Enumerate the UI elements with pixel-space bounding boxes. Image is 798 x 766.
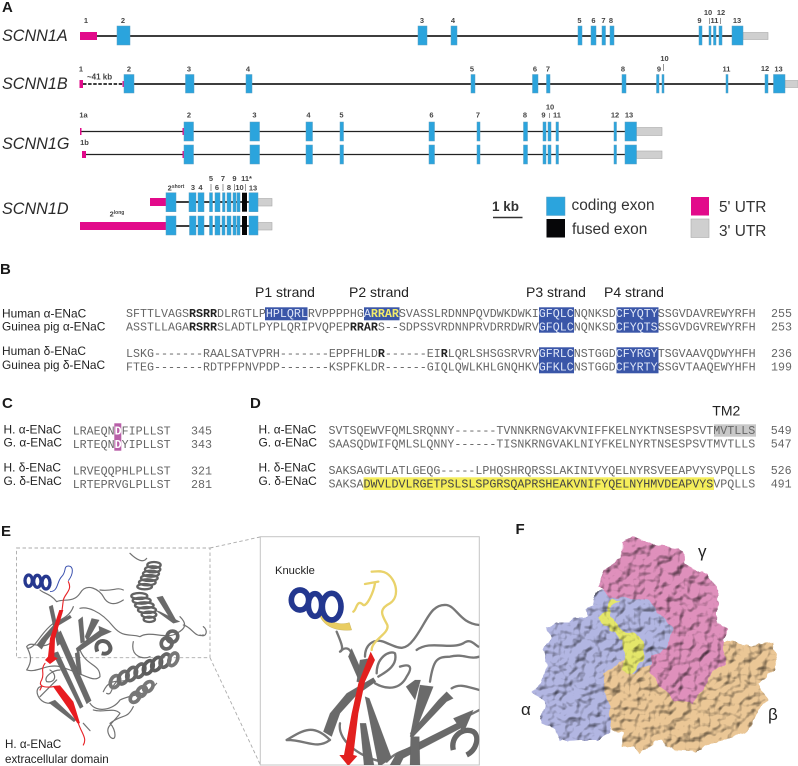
gene SCNN1B: ~41 kb: [87, 72, 112, 82]
subunit labels: γ: [698, 542, 707, 561]
panel letter E: E: [1, 523, 11, 540]
sequences: SVTSQEWVFQMLSRQNNY------TVNNKRNGVAKVNIFFKELNYKTNSESPSVTMVTLLS: [328, 424, 755, 438]
labels: G. δ-ENaC: [4, 474, 62, 488]
strand headings: P3 strand: [526, 284, 586, 300]
panel letter D: D: [250, 395, 261, 412]
sequences: [73, 425, 212, 492]
gene SCNN1B: 9: [657, 64, 661, 74]
sequence labels: Guinea pig α-ENaC: [2, 320, 106, 334]
inset ribbon: [287, 571, 479, 766]
gene SCNN1G: [2, 102, 662, 164]
gene SCNN1A: 10: [704, 8, 712, 17]
panel E: extracellular domain ribbon: [1, 523, 479, 766]
label: H. alpha-ENaC extracellular domain: extracellular domain: [5, 753, 109, 766]
gene SCNN1D: 6: [215, 183, 219, 192]
gene SCNN1A: 7: [601, 16, 606, 25]
gene SCNN1A: 12: [717, 8, 725, 17]
sequences: SAKSAGWTLATLGEQG-----LPHQSHRQRSSLAKINIVYQELNYRSVEEAPVYSVPQLLS: [328, 464, 755, 478]
gene SCNN1D: long: [114, 210, 124, 216]
sequences: 321: [191, 465, 212, 479]
gene SCNN1D: 13: [249, 184, 257, 192]
gene SCNN1D: 2: [168, 184, 172, 192]
sequences: 199: [771, 360, 792, 374]
scale bar 1 kb: 1 kb: [492, 199, 519, 214]
highlighted aspartate: [114, 423, 121, 451]
sequences: ASSTLLAGARSRRSLADTLPYPLQRIPVQPEPRRARS--SDPSSVRDNNPRVDRRDWRVGFQLCNQNKSDCFYQTSSSGVDGVREWYRFH: [126, 320, 756, 334]
sequences: 345: [191, 425, 212, 439]
gene SCNN1G: 1a: [79, 110, 88, 120]
gene SCNN1A: 8: [609, 16, 613, 25]
gene SCNN1D: 5: [209, 174, 213, 183]
gene SCNN1G: 10: [546, 102, 554, 112]
sequences: 491: [771, 477, 792, 491]
gene SCNN1B: 5: [470, 64, 474, 74]
sequences: 526: [771, 464, 792, 478]
labels: [4, 422, 62, 488]
zoom selection box and connectors: [16, 537, 260, 764]
legend: 5' UTR: [719, 199, 766, 216]
gene SCNN1G: 1b: [80, 138, 89, 147]
gene SCNN1B: 12: [761, 64, 769, 73]
panel letter F: F: [516, 521, 525, 538]
gene SCNN1G: 9: [541, 110, 546, 120]
labels: G. δ-ENaC: [258, 474, 317, 488]
strand headings: P1 strand: [255, 284, 315, 300]
sequences: LSKG-------RAALSATVPRH-------EPPFHLDR------EIRLQRLSHSGSRVRVGFRLCNSTGGDCFYRGYTSGVAAVQDWYHFH: [126, 347, 756, 361]
panel letter B: B: [0, 261, 11, 278]
TM2 heading: TM2: [712, 402, 741, 418]
gene SCNN1D: SCNN1D: [2, 200, 69, 218]
gene SCNN1D: 8: [227, 183, 231, 192]
strand headings: [255, 284, 664, 300]
panel B: alignment of P strands: [0, 261, 792, 374]
gene SCNN1G: 8: [523, 110, 527, 120]
gene SCNN1B: SCNN1B: [2, 75, 68, 93]
gene SCNN1D: 4: [198, 183, 203, 192]
sequences: LRAEQNDFIPLLST: [73, 425, 171, 439]
sequences: [126, 307, 792, 374]
sequences: SAKSADWVLDVLRGETPSLSLSPGRSQAPRSHEAKVNIFYQELNYHMVDEAPVYSVPQLLS: [328, 477, 755, 491]
gene SCNN1A: 3: [420, 16, 424, 25]
legend: [546, 197, 766, 240]
yellow highlight: [364, 477, 714, 490]
label: Knuckle: Knuckle: [275, 565, 315, 577]
zoomed knuckle inset: [260, 537, 479, 766]
legend: coding exon: [572, 197, 655, 214]
gene SCNN1G: 4: [306, 110, 311, 120]
gene SCNN1G: 3: [252, 110, 257, 120]
gene SCNN1A: 6: [591, 16, 596, 25]
label: H. alpha-ENaC extracellular domain: [5, 738, 109, 766]
panel D: alignment: [250, 395, 792, 491]
labels: H. α-ENaC: [258, 422, 317, 436]
gene SCNN1G: 6: [429, 110, 434, 120]
gene SCNN1D: 7: [221, 174, 225, 183]
gene SCNN1G: 12: [611, 110, 619, 120]
gene SCNN1B: 4: [246, 64, 251, 74]
labels: [258, 422, 317, 488]
sequences: 255: [771, 307, 792, 321]
gene SCNN1G: 13: [625, 110, 633, 120]
sequences: SFTTLVAGSRSRRDLRGTLPHPLQRLRVPPPPHGARRARSVASSLRDNNPQVDWKDWKIGFQLCNQNKSDCFYQTYSSGVDAVREWYRFH: [126, 307, 756, 321]
gene SCNN1A: 5: [577, 16, 582, 25]
strand headings: P2 strand: [349, 284, 409, 300]
strand headings: P4 strand: [604, 284, 664, 300]
sequences: 547: [771, 437, 792, 451]
sequences: [328, 424, 792, 491]
gene SCNN1B: 6: [533, 64, 537, 74]
gene SCNN1D: 10: [235, 183, 244, 192]
labels: G. α-ENaC: [258, 436, 317, 450]
gene SCNN1A: 4: [451, 16, 456, 25]
gene SCNN1A: 2: [121, 16, 125, 25]
gene SCNN1G: 2: [187, 110, 191, 120]
sequences: 549: [771, 424, 792, 438]
gene SCNN1D: short: [172, 184, 185, 190]
sequence labels: Human δ-ENaC: [2, 344, 86, 358]
labels: H. δ-ENaC: [258, 460, 316, 474]
gene SCNN1A: 9: [697, 16, 702, 25]
gamma subunit surface: [598, 537, 728, 703]
gene SCNN1D: [2, 174, 272, 235]
TM2 highlight: [714, 424, 756, 437]
gene SCNN1G: 7: [476, 110, 480, 120]
gene SCNN1G: 11: [553, 110, 561, 120]
legend: fused exon: [572, 221, 647, 238]
gene SCNN1B: 11: [723, 64, 730, 74]
panel F: surface structure: [516, 521, 778, 753]
gene SCNN1A: 11: [711, 16, 718, 25]
sequence labels: Guinea pig δ-ENaC: [2, 358, 106, 372]
gene SCNN1A: [2, 8, 768, 45]
gene SCNN1B: 8: [621, 64, 625, 74]
gene SCNN1B: 1: [79, 64, 83, 74]
sequences: FTEG-------RDTPFPNVPDP-------KSPFKLDR------GIQLQWLKHLGNQHKVGFKLCNSTGGDCFYRTYSSGVTAAQEWYHFH: [126, 360, 756, 374]
subunit labels: β: [768, 705, 778, 724]
gene SCNN1A: SCNN1A: [2, 27, 68, 45]
labels: H. δ-ENaC: [4, 460, 61, 474]
gene SCNN1B: 7: [546, 64, 550, 74]
sequences: LRTEPRVGLPLLST: [73, 478, 171, 492]
gene SCNN1B: 3: [187, 64, 191, 74]
sequences: LRTEQNDYIPLLST: [73, 438, 171, 452]
subunit labels: α: [521, 700, 531, 719]
labels: G. α-ENaC: [4, 436, 62, 450]
gene SCNN1A: 13: [733, 16, 741, 25]
sequence labels: [2, 306, 106, 372]
gene SCNN1D: 3: [191, 183, 195, 192]
gene SCNN1D: 9: [232, 174, 237, 183]
gene SCNN1B: 13: [774, 64, 783, 74]
gene SCNN1D: 2: [110, 210, 114, 218]
alpha subunit surface: [533, 590, 690, 742]
beta subunit surface: [603, 640, 777, 753]
panel letter C: C: [2, 395, 13, 412]
legend: 3' UTR: [719, 223, 766, 240]
gene SCNN1A: 1: [84, 16, 88, 25]
sequences: 236: [771, 347, 792, 361]
sequences: SAASQDWIFQMLSLQNNY------TISNKRNGVAKLNIYFKELNYRTNSESPSVTMVTLLS: [328, 437, 755, 451]
ENaC trimer surface: [533, 537, 777, 753]
panel C: alignment: [2, 395, 212, 492]
subunit labels: [521, 542, 778, 724]
labels: H. α-ENaC: [4, 422, 62, 436]
panel A: gene structures: [2, 0, 798, 240]
gene SCNN1B: 10: [660, 54, 669, 63]
sequences: 343: [191, 438, 212, 452]
sequences: LRVEQQPHLPLLST: [73, 465, 171, 479]
gene SCNN1G: SCNN1G: [2, 135, 69, 153]
label: H. alpha-ENaC extracellular domain: H. α-ENaC: [5, 738, 61, 751]
sequence labels: Human α-ENaC: [2, 306, 87, 320]
sequences: 281: [191, 478, 212, 492]
gene SCNN1B: 2: [127, 64, 131, 74]
strand highlights: [265, 307, 658, 373]
ribbon structure: [25, 553, 206, 745]
gene SCNN1D: 11*: [241, 174, 252, 183]
gene SCNN1G: 5: [339, 110, 344, 120]
yellow knuckle surface: [598, 600, 645, 673]
sequences: 253: [771, 320, 792, 334]
gene SCNN1B: [2, 54, 798, 93]
